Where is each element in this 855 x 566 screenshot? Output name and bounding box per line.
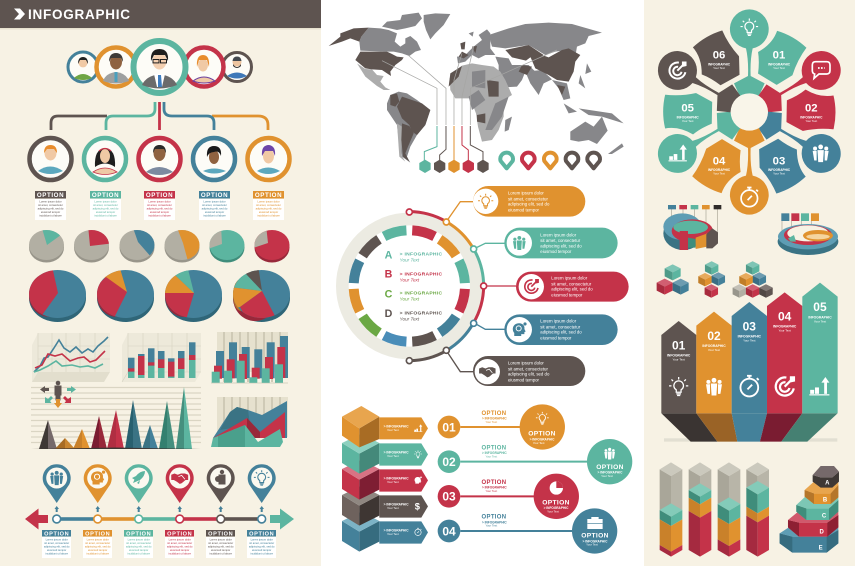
tab teal: Your Text xyxy=(387,454,399,458)
column 2 xyxy=(689,462,711,557)
option card brown xyxy=(35,191,66,220)
option card teal: adipiscing elit, sed do xyxy=(93,206,119,210)
option card 5: eiusmod tempor xyxy=(211,548,230,552)
arrow column 03 xyxy=(732,302,767,413)
option card 1: OPTION xyxy=(44,532,69,538)
A B C D labels: > INFOGRAPHIC xyxy=(400,252,442,258)
arrow column 01: INFOGRAPHIC xyxy=(667,354,691,358)
option card 6: sit amet, consectetur xyxy=(249,541,274,545)
petal labels: 03 xyxy=(773,155,785,167)
option card 3: incididunt ut labore xyxy=(127,552,150,556)
tab slate xyxy=(379,521,428,544)
avatar: orange hair man xyxy=(30,138,72,180)
petal labels: Your Text xyxy=(713,172,725,176)
map connector lines xyxy=(382,47,557,125)
option card red: incididunt ut labore xyxy=(148,214,171,218)
pin: figure with gear xyxy=(207,464,235,503)
isometric stacked columns xyxy=(660,462,769,557)
petal labels: 06 xyxy=(713,49,725,61)
location pins timeline xyxy=(25,464,294,530)
hexagon markers xyxy=(419,160,489,173)
cube cluster 2 xyxy=(698,261,725,298)
option card 3: Lorem ipsum dolor xyxy=(128,538,150,542)
option card orange: OPTION xyxy=(255,192,282,199)
arrow column 05: Your Text xyxy=(814,319,826,323)
avatar: brown bearded man xyxy=(222,52,252,82)
option card 5: incididunt ut labore xyxy=(209,552,232,556)
petals xyxy=(649,21,849,203)
petal labels: Your Text xyxy=(773,66,785,70)
petal labels: Your Text xyxy=(682,119,694,123)
option card brown: adipiscing elit, sed do xyxy=(38,206,64,210)
pie: large red slice xyxy=(254,230,290,262)
option card 2 xyxy=(83,530,112,558)
numbered option 02: OPTION xyxy=(596,464,624,471)
arrow column 01: 01 xyxy=(672,339,686,353)
shadow xyxy=(664,438,837,442)
numbered option 03: 03 xyxy=(442,490,456,504)
arrow column 04 xyxy=(767,292,802,413)
option card 6 xyxy=(247,530,276,558)
petal labels: INFOGRAPHIC xyxy=(768,62,791,66)
pin: bulb xyxy=(248,464,276,503)
isometric stack with numbered options xyxy=(342,404,632,554)
node circles xyxy=(406,209,487,364)
pie: five slices xyxy=(233,270,290,322)
option card 3: adipiscing elit, sed do xyxy=(126,544,152,548)
A B C D labels: Your Text xyxy=(400,258,420,263)
numbered option 01: 01 xyxy=(442,420,456,434)
option card orange: adipiscing elit, sed do xyxy=(256,206,282,210)
team member avatars row xyxy=(30,138,290,180)
numbered option 02: Your Text xyxy=(485,454,497,458)
petal labels: 04 xyxy=(713,155,726,167)
option card 6: eiusmod tempor xyxy=(252,548,271,552)
option card 4: adipiscing elit, sed do xyxy=(167,544,193,548)
pill: brown xyxy=(473,356,585,386)
A B C D labels: D xyxy=(385,308,393,320)
isometric cube clusters xyxy=(657,261,773,298)
option card slate xyxy=(199,191,230,220)
option card 6: Lorem ipsum dolor xyxy=(251,538,273,542)
option card teal: Lorem ipsum dolor xyxy=(94,200,117,204)
numbered option 01 xyxy=(438,404,565,450)
petal labels: INFOGRAPHIC xyxy=(708,62,731,66)
arrow column 04: 04 xyxy=(778,310,792,324)
hub xyxy=(731,93,768,131)
mountain peak chart xyxy=(31,387,201,449)
avatar: man with glasses, lead xyxy=(134,41,186,93)
A B C D labels: Your Text xyxy=(400,297,420,302)
arrow tabs xyxy=(379,417,428,544)
option card 3 xyxy=(124,530,153,558)
tab orange: > INFOGRAPHIC xyxy=(384,425,409,429)
numbered option 02: OPTION xyxy=(482,445,506,451)
option card red xyxy=(144,191,175,220)
avatar: orange haired woman xyxy=(184,48,224,86)
numbered option 03: OPTION xyxy=(542,499,570,506)
outer gray ring xyxy=(342,219,476,353)
3D line chart xyxy=(32,333,110,382)
arrow column 02: INFOGRAPHIC xyxy=(702,344,726,348)
option card 4: OPTION xyxy=(167,532,192,538)
arrow columns chart xyxy=(661,283,838,442)
A B C D labels: Your Text xyxy=(400,277,420,282)
3D stacked bar chart xyxy=(122,333,201,382)
pie: orange slice xyxy=(164,230,200,262)
3D ring chart with flags xyxy=(663,205,721,250)
tab orange xyxy=(379,417,428,439)
numbered option 01: > INFOGRAPHIC xyxy=(482,417,507,421)
option card slate: sit amet, consectetur xyxy=(202,203,227,207)
petal labels: INFOGRAPHIC xyxy=(708,168,731,172)
pill: teal: sit amet, consectetur xyxy=(540,238,581,243)
option card 1 xyxy=(42,530,71,558)
numbered option 03: OPTION xyxy=(482,480,506,486)
arrow column 04: INFOGRAPHIC xyxy=(773,325,797,329)
pie: large teal slice xyxy=(210,230,244,262)
petal labels: INFOGRAPHIC xyxy=(677,115,699,119)
option card 4: eiusmod tempor xyxy=(170,548,189,552)
pill: teal: Lorem ipsum dolor xyxy=(540,232,577,237)
petal labels: Your Text xyxy=(773,172,785,176)
pill: slate xyxy=(504,314,618,345)
pill: brown: sit amet, consectetur xyxy=(508,366,548,371)
option card teal: incididunt ut labore xyxy=(94,214,117,218)
arrow column 03: Your Text xyxy=(743,339,756,343)
avatar: dark skinned man xyxy=(138,138,180,180)
small 3D pie charts row xyxy=(29,230,290,262)
tier A: A xyxy=(825,481,830,487)
cube cluster 3 xyxy=(733,261,773,298)
pill: orange: Lorem ipsum dolor xyxy=(508,191,544,196)
option card 3: OPTION xyxy=(126,532,151,538)
pill: red: sit amet, consectetur xyxy=(551,281,592,286)
option card 4: incididunt ut labore xyxy=(168,552,191,556)
pie: slate slice xyxy=(120,230,154,262)
option card teal: OPTION xyxy=(92,192,119,199)
numbered option 02: > INFOGRAPHIC xyxy=(598,471,623,475)
3D clustered bar chart xyxy=(211,332,288,383)
option card 3: eiusmod tempor xyxy=(129,548,148,552)
pie: red and slate xyxy=(29,270,86,322)
pill: teal: eiusmod tempor xyxy=(540,249,572,254)
pie: orange teal red slate xyxy=(165,270,222,322)
pie: teal slice xyxy=(29,230,64,262)
numbered option 01: Your Text xyxy=(533,441,545,445)
tab red xyxy=(379,469,428,492)
A B C D labels: B xyxy=(385,269,393,281)
3D stadium ring chart with flags xyxy=(778,213,838,255)
arrow left xyxy=(25,508,48,530)
numbered option 01: > INFOGRAPHIC xyxy=(530,437,555,441)
A B C D labels xyxy=(385,249,442,321)
header band xyxy=(0,0,321,30)
pill: slate: sit amet, consectetur xyxy=(540,324,581,329)
pin: rocket xyxy=(125,464,153,503)
arrow column 02 xyxy=(696,312,732,413)
pill: brown: adipiscing elit, sed do xyxy=(508,372,550,377)
numbered option 03: > INFOGRAPHIC xyxy=(482,486,507,490)
option card 2: Lorem ipsum dolor xyxy=(87,538,109,542)
pill: brown: eiusmod tempor xyxy=(508,377,540,382)
tier E: E xyxy=(819,546,823,552)
numbered option 03: Your Text xyxy=(547,509,559,513)
option card slate: Lorem ipsum dolor xyxy=(203,200,226,204)
option card red: sit amet, consectetur xyxy=(147,203,172,207)
lower dark shapes xyxy=(661,413,838,442)
tier D: D xyxy=(819,530,824,536)
option card brown: OPTION xyxy=(37,192,64,199)
option card slate: OPTION xyxy=(201,192,228,199)
tab red: Your Text xyxy=(387,480,399,484)
option card orange: incididunt ut labore xyxy=(257,214,280,218)
numbered option 01: Your Text xyxy=(485,420,497,424)
A B C D labels: > INFOGRAPHIC xyxy=(400,271,442,277)
option card red: Lorem ipsum dolor xyxy=(148,200,171,204)
petal labels: INFOGRAPHIC xyxy=(768,168,791,172)
numbered option 02: 02 xyxy=(442,455,456,469)
pin: handshake xyxy=(166,464,194,503)
option card red: eiusmod tempor xyxy=(150,210,169,214)
option card 1: incididunt ut labore xyxy=(45,552,68,556)
arrow column 04: Your Text xyxy=(779,329,791,333)
avatar: dark curly hair woman xyxy=(193,138,235,180)
A B C D labels: C xyxy=(385,288,393,300)
petal labels xyxy=(677,49,823,176)
option card orange: sit amet, consectetur xyxy=(256,203,281,207)
option cards row 2 xyxy=(42,530,276,558)
circular infographic xyxy=(342,186,629,386)
tab orange: Your Text xyxy=(387,428,399,432)
arrow right xyxy=(270,508,294,530)
option card 2: OPTION xyxy=(85,532,110,538)
pill: orange xyxy=(473,186,585,217)
spokes and circles xyxy=(651,9,848,215)
petal labels: 05 xyxy=(681,103,694,115)
numbered option 04: OPTION xyxy=(482,515,506,521)
option card 1: Lorem ipsum dolor xyxy=(46,538,68,542)
option card brown: eiusmod tempor xyxy=(41,210,60,214)
option card brown: Lorem ipsum dolor xyxy=(39,200,62,204)
numbered option 03 xyxy=(438,474,579,519)
pill: slate: adipiscing elit, sed do xyxy=(540,330,582,335)
top team avatars xyxy=(68,41,252,93)
arrow column 05 xyxy=(802,283,838,413)
isometric stack xyxy=(342,406,379,552)
pill: teal xyxy=(504,228,618,258)
A B C D labels: Your Text xyxy=(400,316,420,321)
numbered option 04 xyxy=(438,508,617,554)
petal labels: Your Text xyxy=(713,66,725,70)
option card 2: eiusmod tempor xyxy=(88,548,107,552)
tab brown: $ xyxy=(415,502,421,512)
option card 5: adipiscing elit, sed do xyxy=(208,544,234,548)
timeline bar xyxy=(53,515,266,523)
tab brown xyxy=(379,495,428,518)
avatar: black hair woman xyxy=(84,138,126,180)
world map xyxy=(329,13,624,173)
hexagon petal diagram xyxy=(649,9,849,215)
column 4 xyxy=(746,462,769,557)
3D area chart xyxy=(211,397,288,447)
numbered option 01: OPTION xyxy=(528,431,556,438)
numbered option 04: > INFOGRAPHIC xyxy=(583,539,608,543)
option card slate: eiusmod tempor xyxy=(205,210,224,214)
petal labels: 02 xyxy=(805,103,818,115)
A B C D labels: > INFOGRAPHIC xyxy=(400,310,442,316)
numbered option 03: > INFOGRAPHIC xyxy=(544,506,569,510)
numbered option 03: Your Text xyxy=(485,489,497,493)
arrow column 03: INFOGRAPHIC xyxy=(738,335,762,339)
option card 4: sit amet, consectetur xyxy=(167,541,192,545)
petal labels: 01 xyxy=(773,50,785,62)
numbered option 04: 04 xyxy=(442,524,456,538)
colored connector lines xyxy=(424,126,483,161)
option card teal xyxy=(90,191,121,220)
numbered option 02: Your Text xyxy=(601,474,613,478)
option card 2: incididunt ut labore xyxy=(86,552,109,556)
avatar: woman with glasses xyxy=(68,52,98,82)
pill: orange: sit amet, consectetur xyxy=(508,196,548,201)
pill: orange: eiusmod tempor xyxy=(508,207,540,212)
tab slate: > INFOGRAPHIC xyxy=(384,529,409,533)
pill: slate: eiusmod tempor xyxy=(540,335,572,340)
option card 5: OPTION xyxy=(208,532,233,538)
arrow column 01: Your Text xyxy=(673,358,685,362)
numbered option 04: > INFOGRAPHIC xyxy=(482,520,507,524)
option card 6: adipiscing elit, sed do xyxy=(249,544,275,548)
avatar: man in suit xyxy=(96,48,136,86)
numbered option 04: OPTION xyxy=(581,533,609,540)
arrow column 03: 03 xyxy=(743,319,756,333)
option card brown: sit amet, consectetur xyxy=(38,203,63,207)
option card teal: eiusmod tempor xyxy=(96,210,115,214)
option card slate: adipiscing elit, sed do xyxy=(202,206,228,210)
option card red: adipiscing elit, sed do xyxy=(147,206,173,210)
arrow column 05: INFOGRAPHIC xyxy=(808,315,832,319)
pie: orange red slate xyxy=(97,270,154,322)
option card brown: incididunt ut labore xyxy=(39,214,62,218)
pill: red: adipiscing elit, sed do xyxy=(551,287,593,292)
arrow column 02: Your Text xyxy=(708,348,720,352)
tab teal: > INFOGRAPHIC xyxy=(384,451,409,455)
petal icons xyxy=(669,19,830,207)
option card 5: Lorem ipsum dolor xyxy=(210,538,232,542)
arrow column 05: 05 xyxy=(813,300,827,314)
pill: orange: adipiscing elit, sed do xyxy=(508,202,550,207)
pill: brown: Lorem ipsum dolor xyxy=(508,361,544,366)
option card 4: Lorem ipsum dolor xyxy=(169,538,191,542)
option card 1: adipiscing elit, sed do xyxy=(44,544,70,548)
header band: INFOGRAPHIC xyxy=(28,7,131,22)
option card 2: sit amet, consectetur xyxy=(85,541,110,545)
numbered option 04: Your Text xyxy=(485,524,497,528)
option card 5 xyxy=(206,530,235,558)
pill: red: Lorem ipsum dolor xyxy=(551,276,588,281)
option card slate: incididunt ut labore xyxy=(203,214,226,218)
arrow column 01 xyxy=(661,321,696,413)
numbered option 02 xyxy=(438,439,632,484)
ring segments xyxy=(354,230,465,342)
hexagonal tier pyramid xyxy=(780,466,839,553)
tab brown: > INFOGRAPHIC xyxy=(384,503,409,507)
option card 5: sit amet, consectetur xyxy=(208,541,233,545)
tab brown: Your Text xyxy=(387,506,399,510)
numbered option 04: Your Text xyxy=(586,543,598,547)
pie: red slice xyxy=(74,230,109,262)
tab slate: Your Text xyxy=(387,532,399,536)
A B C D labels: > INFOGRAPHIC xyxy=(400,291,442,297)
numbered option 02: > INFOGRAPHIC xyxy=(482,451,507,455)
tab red: > INFOGRAPHIC xyxy=(384,477,409,481)
option card 4 xyxy=(165,530,194,558)
connector lines xyxy=(446,202,516,372)
option card 2: adipiscing elit, sed do xyxy=(85,544,111,548)
large 3D pie charts row xyxy=(29,270,290,322)
option card 3: sit amet, consectetur xyxy=(126,541,151,545)
option card orange: eiusmod tempor xyxy=(259,210,278,214)
pill: red xyxy=(516,272,629,302)
pin: people xyxy=(43,464,71,503)
person with direction arrows icon xyxy=(40,381,76,408)
petal labels: INFOGRAPHIC xyxy=(800,115,823,119)
pill: red: eiusmod tempor xyxy=(551,292,583,297)
tier B: B xyxy=(823,497,828,503)
A B C D labels: A xyxy=(385,249,393,261)
small up arrows xyxy=(54,506,264,512)
org chart connectors xyxy=(51,102,268,130)
option cards row 1 xyxy=(35,191,284,220)
option card teal: sit amet, consectetur xyxy=(93,203,118,207)
pill: teal: adipiscing elit, sed do xyxy=(540,243,582,248)
pin markers xyxy=(500,153,600,168)
column 1 xyxy=(660,462,682,557)
option card 6: incididunt ut labore xyxy=(250,552,273,556)
pin: head xyxy=(84,464,112,503)
cube cluster 1 xyxy=(657,264,689,295)
outer colored arcs xyxy=(409,212,484,361)
option card red: OPTION xyxy=(146,192,173,199)
column 3 xyxy=(718,462,740,557)
option card 1: sit amet, consectetur xyxy=(44,541,69,545)
tier C: C xyxy=(822,513,827,519)
arrow column 02: 02 xyxy=(707,329,721,343)
option card 1: eiusmod tempor xyxy=(47,548,66,552)
option card 6: OPTION xyxy=(249,532,274,538)
option card orange: Lorem ipsum dolor xyxy=(257,200,280,204)
numbered option 01: OPTION xyxy=(482,411,506,417)
pill: slate: Lorem ipsum dolor xyxy=(540,319,577,324)
petal labels: Your Text xyxy=(805,119,817,123)
tab teal xyxy=(379,443,428,466)
option card orange xyxy=(253,191,284,220)
avatar: purple hair xyxy=(248,138,290,180)
